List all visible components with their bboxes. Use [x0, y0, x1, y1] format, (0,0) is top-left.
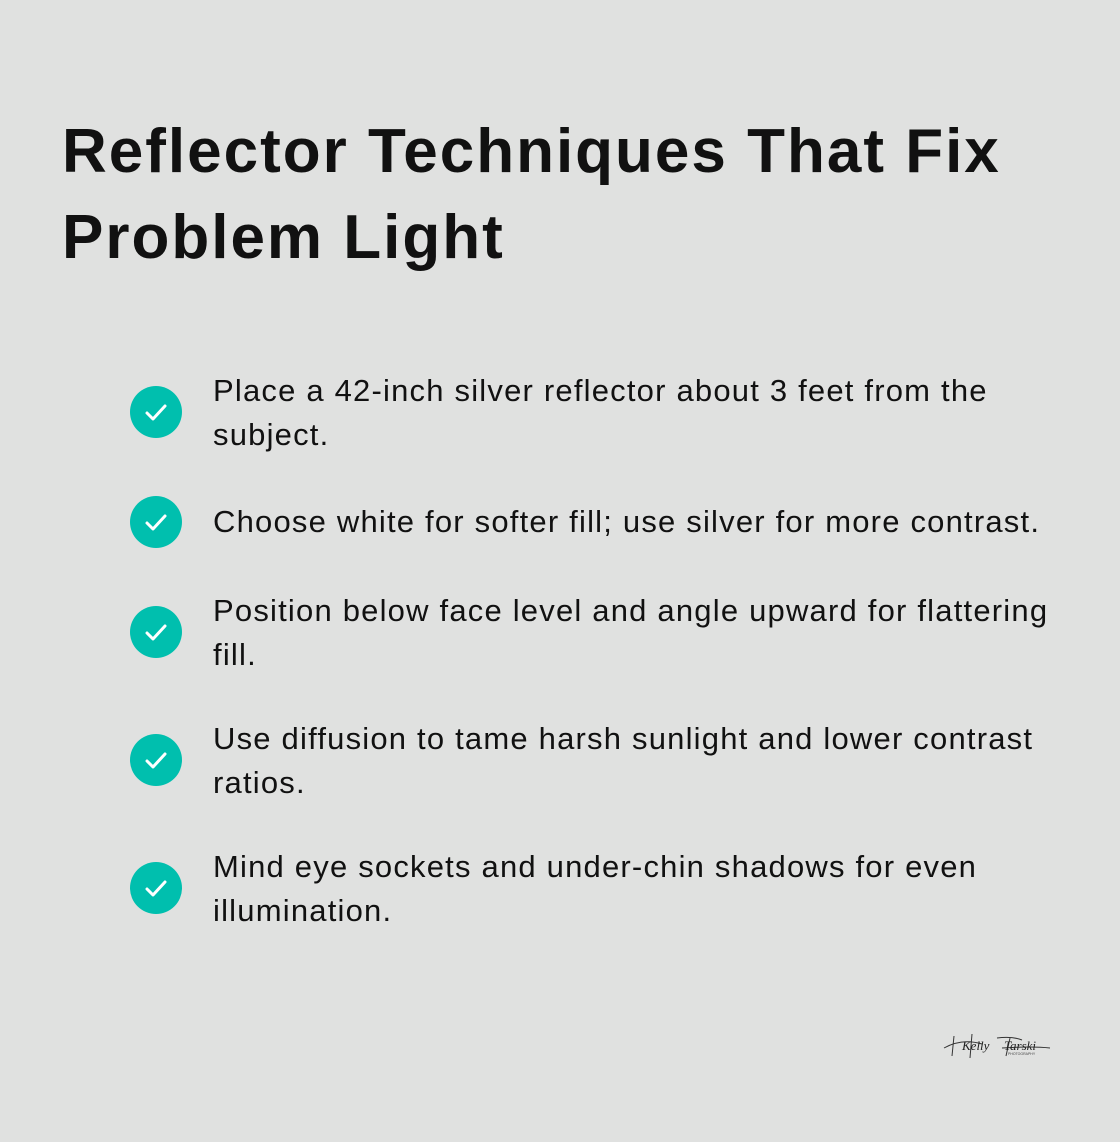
icon: check [130, 386, 182, 438]
item 4 [130, 721, 1033, 800]
title [62, 117, 1001, 272]
title: Reflector Techniques That Fix [62, 117, 1001, 186]
icon: check [130, 606, 182, 658]
icon: check [130, 862, 182, 914]
text: Use diffusion to tame harsh sunlight and lower contrast [213, 721, 1033, 756]
text [213, 373, 988, 452]
text: fill. [213, 637, 257, 672]
icon: check [130, 496, 182, 548]
text: Position below face level and angle upward for flattering [213, 593, 1048, 628]
logo [944, 1034, 1050, 1058]
title: Problem Light [62, 203, 505, 272]
text [213, 593, 1048, 672]
logo: Tarski [1004, 1038, 1036, 1053]
item 2 [130, 496, 1040, 548]
icon: check [130, 734, 182, 786]
text: ratios. [213, 765, 306, 800]
text: subject. [213, 417, 329, 452]
text: illumination. [213, 893, 392, 928]
item 1 [130, 373, 988, 452]
text [213, 721, 1033, 800]
logo: Kelly [961, 1038, 990, 1053]
text: Place a 42-inch silver reflector about 3 feet from the [213, 373, 988, 408]
text: Mind eye sockets and under-chin shadows for even [213, 849, 977, 884]
item 5 [130, 849, 977, 928]
text [213, 849, 977, 928]
item 3 [130, 593, 1048, 672]
text: Choose white for softer fill; use silver for more contrast. [213, 504, 1040, 539]
logo: PHOTOGRAPHY [1008, 1052, 1036, 1056]
